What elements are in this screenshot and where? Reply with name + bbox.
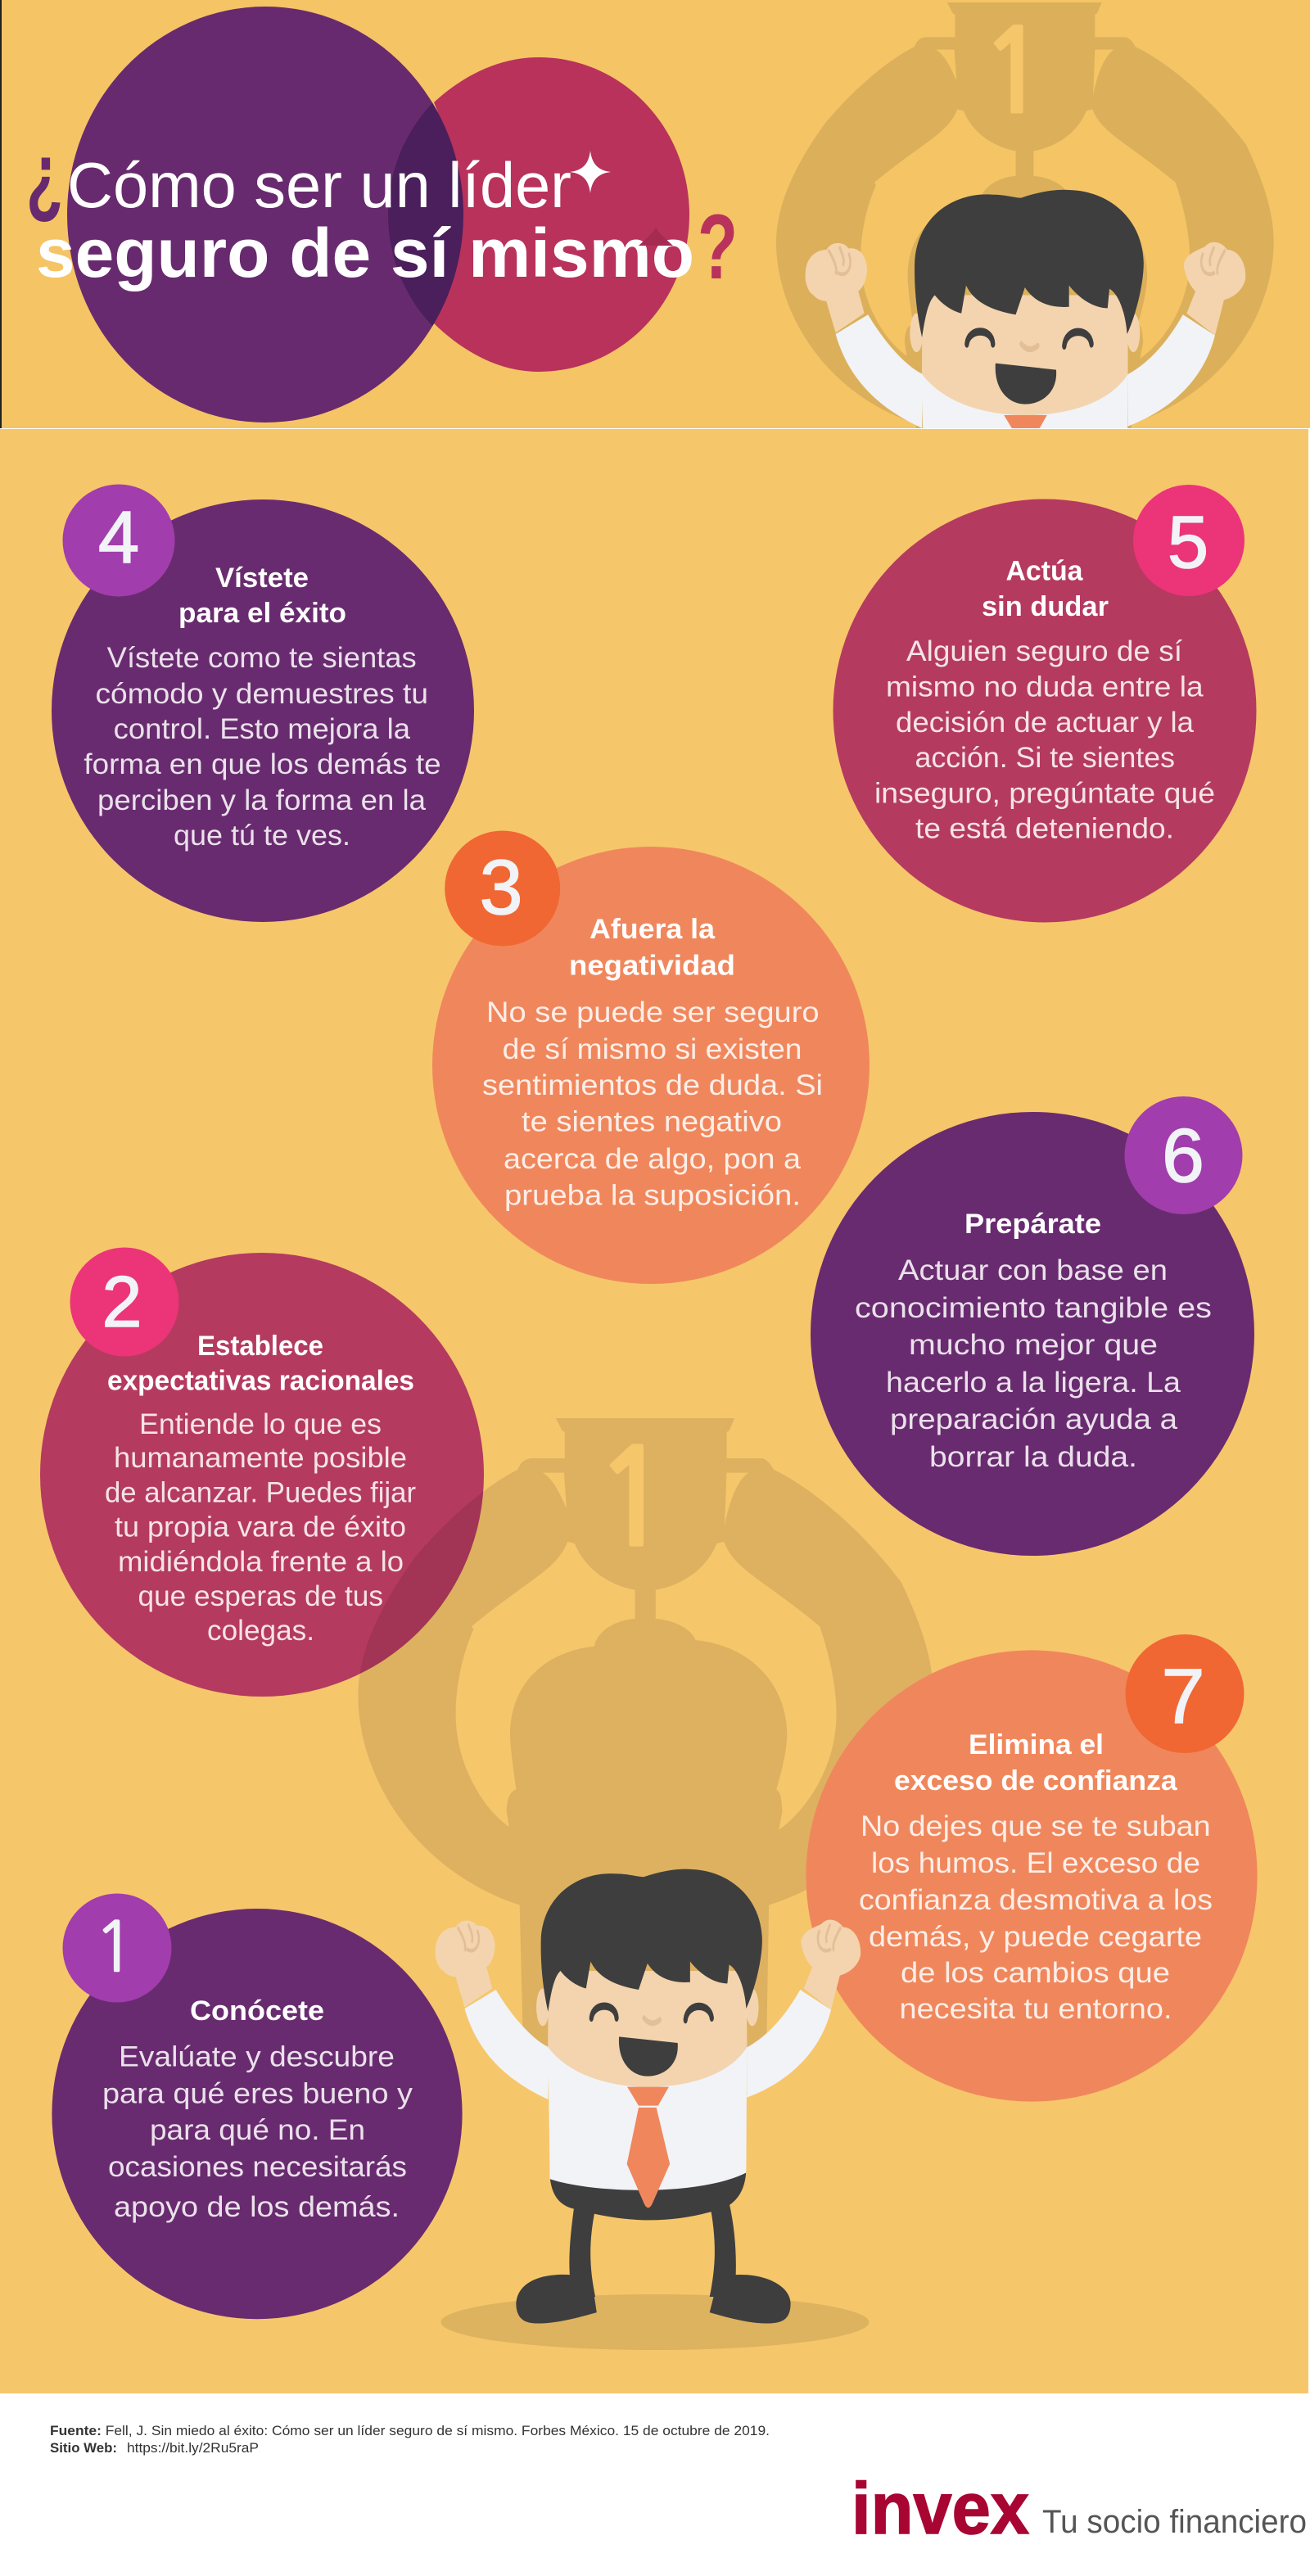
badge 4: [62, 485, 175, 596]
step 2 heading: Establece: [197, 1331, 323, 1362]
step 4 text: forma en que los demás te: [84, 748, 441, 780]
badge 3: 3: [480, 844, 522, 931]
step 4 text: [84, 642, 441, 852]
step 6 text: mucho mejor que: [909, 1329, 1158, 1361]
step 7 heading: exceso de confianza: [894, 1765, 1178, 1796]
step 6 text: preparación ayuda a: [890, 1403, 1178, 1435]
header character: [806, 190, 1246, 428]
step 5 heading: sin dudar: [982, 591, 1109, 622]
step 2 text: de alcanzar. Puedes fijar: [105, 1477, 416, 1508]
step 4 text: perciben y la forma en la: [97, 784, 427, 816]
step 7 text: de los cambios que: [901, 1957, 1170, 1989]
step 3 text: sentimientos de duda. Si: [482, 1069, 823, 1101]
step 5 text: Alguien seguro de sí: [906, 635, 1182, 667]
step 5 text: inseguro, pregúntate qué: [874, 778, 1215, 810]
step 4 text: control. Esto mejora la: [114, 713, 411, 745]
step 2 text: midiéndola frente a lo: [118, 1546, 404, 1578]
logo: invex: Tu socio financiero: [1042, 2504, 1307, 2540]
step 7 text: necesita tu entorno.: [899, 1993, 1172, 2025]
step 2 text: colegas.: [207, 1615, 314, 1647]
ground shadow: [440, 2294, 870, 2350]
badge 7: 7: [1162, 1653, 1204, 1740]
step 2 number and text: [70, 1248, 416, 1647]
badge 4: 4: [98, 497, 139, 579]
step 2 text: Entiende lo que es: [139, 1408, 382, 1440]
header circle: crimson: [434, 57, 689, 372]
step 7 text: No dejes que se te suban: [861, 1810, 1211, 1842]
step 3 heading: [569, 914, 735, 982]
panel: step 3: [432, 830, 870, 1284]
icon: sparkle: [570, 151, 611, 193]
step 2 text: humanamente posible: [114, 1442, 407, 1474]
step 4 text: cómodo y demuestres tu: [95, 678, 428, 710]
badge 7: [1125, 1634, 1244, 1753]
step 3 text: de sí mismo si existen: [503, 1033, 802, 1065]
badge 6: 6: [1162, 1113, 1204, 1198]
step 3 heading: Afuera la: [590, 914, 716, 945]
icon: faint sparkle: [639, 227, 673, 246]
step 1 text: Evalúate y descubre: [119, 2040, 395, 2073]
step 3 text: [482, 997, 823, 1212]
character: [436, 1869, 861, 2324]
source note: Sitio Web:: [50, 2440, 117, 2456]
step 1 text: para qué no. En: [150, 2114, 365, 2146]
badge 2: 2: [102, 1261, 142, 1342]
icon: header trophy: [776, 2, 1274, 428]
title: [29, 157, 734, 291]
step 2 heading: [107, 1331, 414, 1397]
panel: step 1: [52, 1893, 463, 2319]
panel: step 4: [52, 485, 474, 922]
step 7 text: los humos. El exceso de: [871, 1847, 1200, 1879]
step 5 heading: [982, 555, 1109, 622]
logo: invex: [852, 2467, 1307, 2549]
title: ¿: [26, 124, 63, 226]
panel: main background: [0, 429, 1308, 2393]
step 7 heading: Elimina el: [969, 1729, 1104, 1760]
step 7 text: demás, y puede cegarte: [869, 1921, 1202, 1953]
step 1 text: apoyo de los demás.: [114, 2191, 400, 2223]
step 1 heading: Conócete: [190, 1995, 324, 2027]
badge 3: [445, 830, 560, 947]
panel: step 2: [40, 1253, 484, 1697]
step 4 text: Vístete como te sientas: [107, 642, 417, 674]
step 3 heading: negatividad: [569, 951, 735, 982]
step 5 heading: Actúa: [1005, 555, 1084, 586]
logo: invex: invex: [852, 2467, 1029, 2549]
step 5 text: mismo no duda entre la: [886, 671, 1204, 703]
step 3 text: te sientes negativo: [522, 1105, 782, 1138]
badge 5: 5: [1168, 502, 1208, 584]
step 1 text: ocasiones necesitarás: [108, 2151, 407, 2183]
step 5 text: decisión de actuar y la: [896, 707, 1195, 739]
badge 2: [70, 1248, 178, 1356]
step 6 text: [855, 1254, 1212, 1473]
step 1 text: [102, 2040, 413, 2223]
panel: step 6: [811, 1096, 1254, 1556]
badge 1: 1: [94, 1913, 135, 1982]
panel: header: [0, 0, 1310, 428]
badge 6: [1125, 1096, 1243, 1214]
panel: step 7: [806, 1634, 1258, 2102]
step 6 heading: Prepárate: [964, 1209, 1101, 1240]
panel: step 5: [833, 485, 1256, 922]
step 4 text: que tú te ves.: [174, 820, 350, 852]
badge 1: [62, 1893, 172, 2003]
step 4 heading: Vístete: [215, 563, 309, 594]
step 4 heading: para el éxito: [178, 598, 346, 629]
step 4 heading: [178, 563, 346, 629]
step 5 text: acción. Si te sientes: [915, 742, 1175, 774]
step 7 text: confianza desmotiva a los: [859, 1884, 1213, 1916]
step 6 text: Actuar con base en: [898, 1254, 1168, 1286]
header circle overlap: [388, 103, 463, 326]
step 5 text: te está deteniendo.: [915, 812, 1174, 845]
source note: [50, 2423, 770, 2456]
step 2 text: que esperas de tus: [138, 1580, 383, 1612]
badge 5: [1133, 485, 1244, 596]
title: Cómo ser un líder: [67, 149, 571, 221]
step 6 text: conocimiento tangible es: [855, 1292, 1212, 1324]
step 3 text: prueba la suposición.: [504, 1179, 801, 1212]
step 7 text: [859, 1810, 1213, 2025]
step 3 text: acerca de algo, pon a: [504, 1143, 802, 1175]
icon: trophy shadow: [358, 1418, 933, 2050]
step 7 heading: [894, 1729, 1178, 1796]
step 5 text: [874, 635, 1215, 845]
step 6 text: borrar la duda.: [929, 1441, 1137, 1473]
step 2 text: [105, 1408, 416, 1647]
source note: https://bit.ly/2Ru5raP: [127, 2440, 259, 2456]
step 2 heading: expectativas racionales: [107, 1366, 414, 1397]
step 2 text: tu propia vara de éxito: [115, 1512, 406, 1543]
title: seguro de sí mismo: [36, 215, 694, 291]
step 1 text: para qué eres bueno y: [102, 2078, 413, 2110]
step 6 text: hacerlo a la ligera. La: [886, 1367, 1181, 1399]
step 3 text: No se puede ser seguro: [486, 997, 820, 1028]
title: ?: [698, 196, 738, 298]
header circle: purple: [67, 7, 463, 423]
source note: Fuente: Fell, J. Sin miedo al éxito: Cómo ser un líder seguro de sí mismo. Forbes México. 15 de octubre de 2019.: [50, 2423, 770, 2438]
